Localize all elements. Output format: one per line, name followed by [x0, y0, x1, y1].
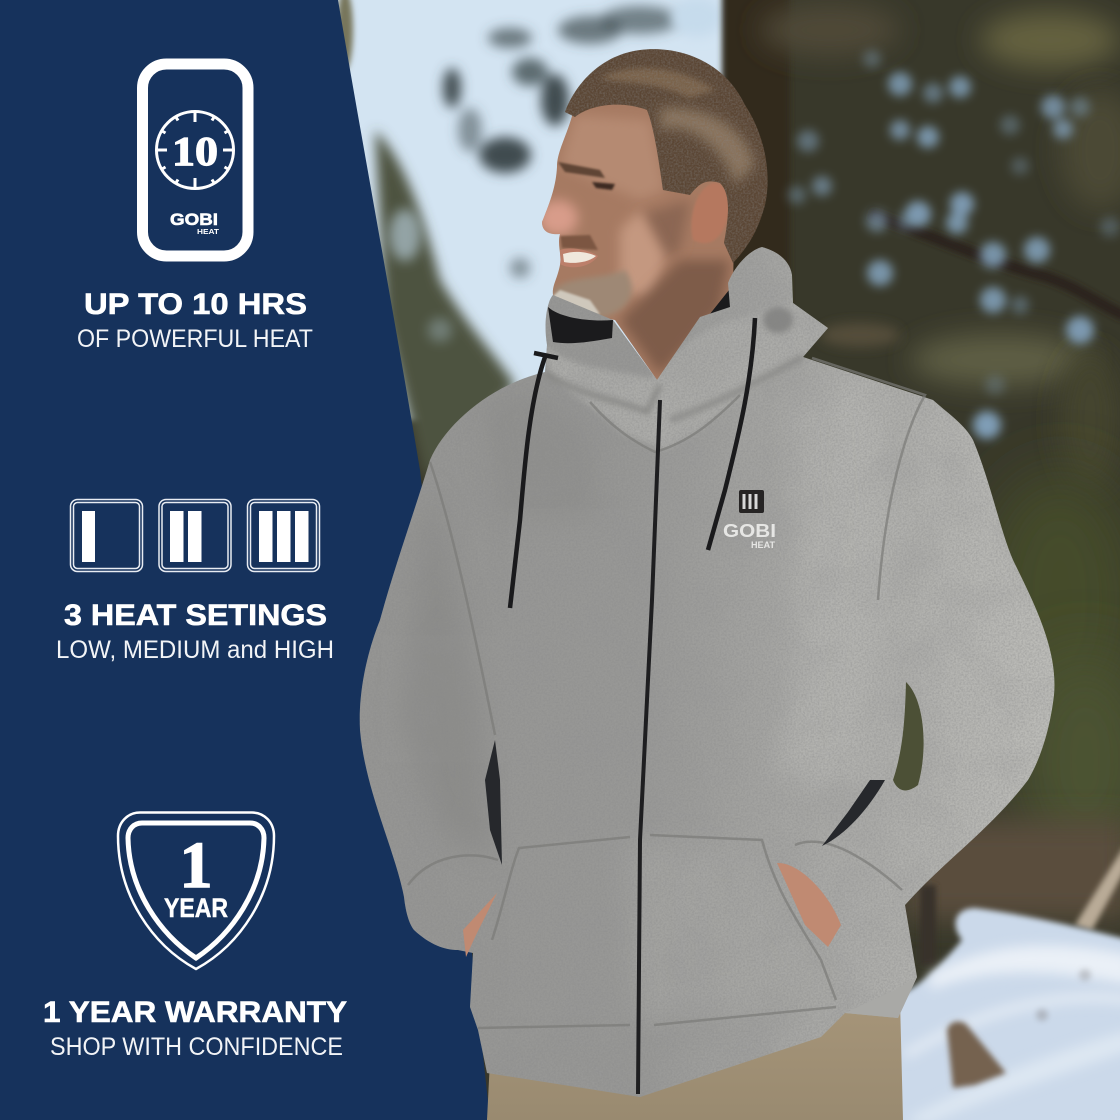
icon: 1 year warranty shield: [118, 812, 274, 969]
subheading: low, medium and high: LOW, MEDIUM and HIGH: [56, 636, 334, 664]
gaps between arms and body: [485, 682, 924, 865]
icon: heat setting high: [248, 500, 320, 572]
ear: [691, 183, 729, 243]
icon: 1 year warranty shield: YEAR: [164, 893, 228, 923]
hood lining behind the neck: [700, 250, 780, 330]
navy side panel: [0, 0, 490, 1120]
heading: up to 10 hrs: UP TO 10 HRS: [84, 288, 307, 321]
icon: battery with 10 hour dial: [142, 64, 248, 256]
man wearing heated hoodie: [350, 40, 1060, 1120]
face and neck: [538, 100, 735, 380]
hoodie body and sleeves: [360, 247, 1054, 1097]
hoodie shading and texture: [350, 240, 1060, 1100]
icon: battery with 10 hour dial: 10: [172, 128, 218, 174]
drawstring right: [708, 318, 755, 550]
chest logo: HEAT: [751, 540, 775, 550]
icon: battery with 10 hour dial: GOBI: [170, 210, 218, 229]
icon: heat setting low: [70, 500, 142, 572]
zipper: [638, 400, 660, 1094]
icon: heat setting medium: [159, 500, 231, 572]
black hood lining at the chin: [548, 307, 613, 343]
subheading: shop with confidence: SHOP WITH CONFIDENCE: [50, 1033, 343, 1061]
hair: [565, 49, 768, 263]
heading: 1 year warranty: 1 YEAR WARRANTY: [43, 996, 347, 1029]
chest logo: [723, 490, 776, 550]
subheading: of powerful heat: OF POWERFUL HEAT: [77, 325, 313, 353]
icon: 1 year warranty shield: 1: [180, 829, 212, 902]
drawstring left: [510, 353, 558, 608]
chest logo: GOBI: [723, 521, 776, 541]
ribbed hem at the waist: [845, 977, 917, 1018]
hoodie seams and pockets: [408, 358, 925, 1028]
heading: 3 heat setings: 3 HEAT SETINGS: [64, 599, 327, 632]
icon: battery with 10 hour dial: HEAT: [197, 227, 219, 236]
hands in pockets: [463, 863, 841, 957]
pants: [487, 1000, 903, 1120]
